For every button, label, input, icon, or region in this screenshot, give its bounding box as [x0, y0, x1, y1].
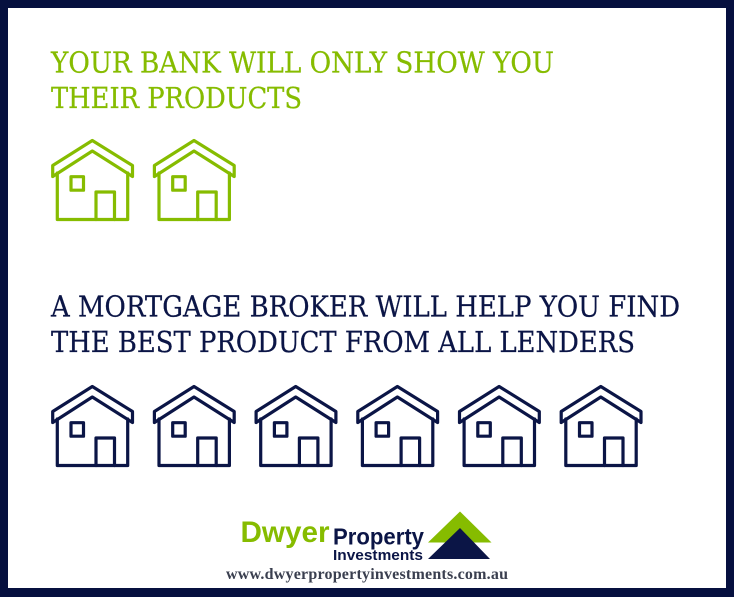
heading: mortgage broker: A MORTGAGE BROKER WILL HELP YOU FIND	[50, 290, 680, 324]
heading: your bank: YOUR BANK WILL ONLY SHOW YOU	[50, 46, 554, 80]
heading: mortgage broker	[50, 290, 680, 359]
icons: six navy houses	[53, 386, 641, 466]
website address: www.dwyerpropertyinvestments.com.au	[226, 566, 508, 583]
icon: navy house 5	[460, 386, 539, 466]
icon: green house 1	[53, 140, 133, 220]
bottom frame fill	[0, 588, 734, 597]
icon: navy house 1	[53, 386, 133, 466]
logo word: Dwyer: Dwyer	[240, 516, 330, 549]
heading: mortgage broker: THE BEST PRODUCT FROM ALL LENDERS	[51, 326, 635, 359]
icons: two green houses	[53, 140, 234, 220]
icon: navy house 6	[561, 386, 641, 466]
icon: navy house 4	[358, 386, 438, 466]
heading: your bank	[50, 46, 554, 115]
logo word: Investments: Investments	[333, 547, 423, 564]
icon: green house 2	[154, 140, 234, 220]
logo mark: green roof	[428, 512, 492, 542]
logo: Dwyer Property Investments	[240, 512, 492, 564]
logo mark: navy triangle	[428, 528, 490, 559]
heading: your bank: THEIR PRODUCTS	[51, 82, 302, 115]
icon: navy house 3	[256, 386, 336, 466]
icon: navy house 2	[154, 386, 234, 466]
logo word: Property: Property	[333, 524, 424, 550]
